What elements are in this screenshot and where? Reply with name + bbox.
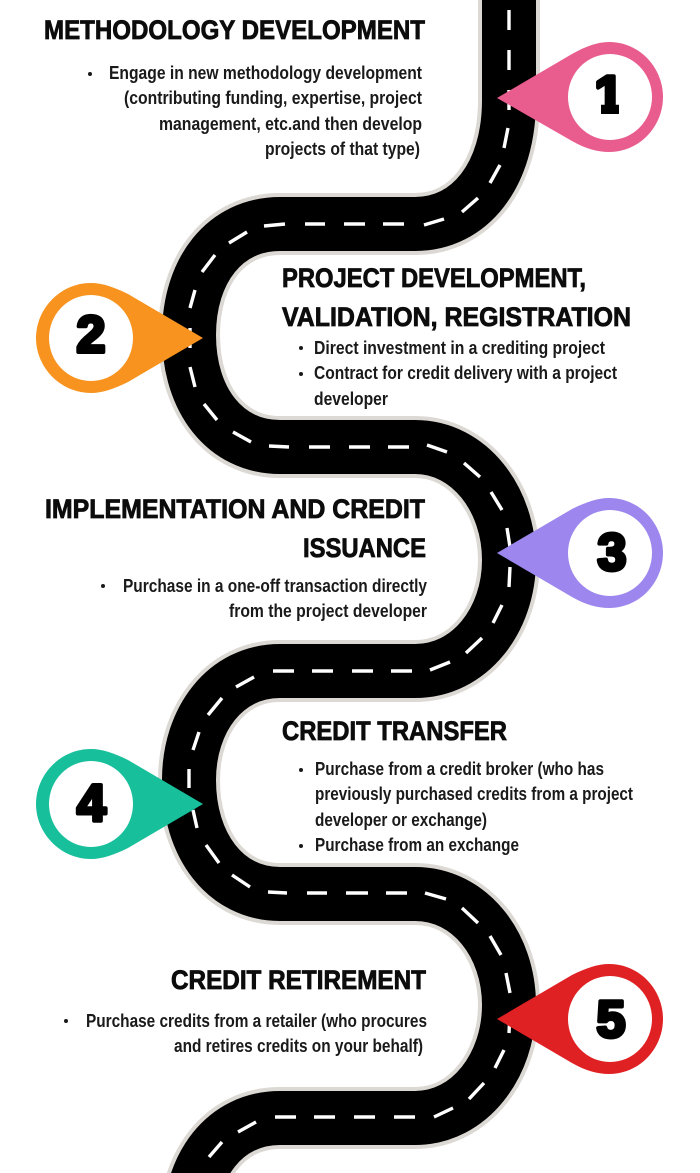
step 1 text: projects of that type) xyxy=(265,138,420,159)
step 2 heading: VALIDATION, REGISTRATION xyxy=(282,302,631,332)
step 5 text: Purchase credits from a retailer (who procures xyxy=(86,1010,427,1031)
step 1 text: management, etc.and then develop xyxy=(159,113,422,134)
step 4 heading: CREDIT TRANSFER xyxy=(282,716,507,746)
step 2 heading xyxy=(282,263,631,332)
step 2 heading: PROJECT DEVELOPMENT, xyxy=(282,263,586,293)
step 5 heading: CREDIT RETIREMENT xyxy=(171,965,426,995)
step 3 heading xyxy=(45,494,426,563)
step 5 pin xyxy=(497,964,663,1074)
step 4 text: previously purchased credits from a project xyxy=(315,783,633,804)
step 4 text: developer or exchange) xyxy=(315,809,487,830)
step 1 heading: METHODOLOGY DEVELOPMENT xyxy=(44,15,425,45)
step 5 text: and retires credits on your behalf) xyxy=(174,1035,423,1056)
step 1 text: Engage in new methodology development xyxy=(109,62,422,83)
step 1 pin: 1 xyxy=(595,66,623,124)
step 1 text: (contributing funding, expertise, project xyxy=(124,87,422,108)
step 4 pin: 4 xyxy=(77,775,106,833)
winding road xyxy=(189,0,510,1173)
step 5 text xyxy=(64,1010,427,1056)
step 3 pin: 3 xyxy=(598,524,626,582)
step 3 heading: ISSUANCE xyxy=(303,533,426,563)
step 4 text xyxy=(299,758,633,855)
step 4 text: Purchase from a credit broker (who has xyxy=(315,758,604,779)
step 4 text: Purchase from an exchange xyxy=(315,834,519,855)
step 2 pin xyxy=(36,283,203,393)
step 3 text: from the project developer xyxy=(229,600,427,621)
step 3 text: Purchase in a one-off transaction directly xyxy=(123,575,428,596)
step 2 text: Contract for credit delivery with a project xyxy=(314,362,617,383)
step 5 pin: 5 xyxy=(597,991,625,1049)
step 3 pin xyxy=(497,498,663,608)
step 1 pin xyxy=(497,42,663,152)
step 2 pin: 2 xyxy=(77,306,105,364)
step 2 text: developer xyxy=(314,388,388,409)
step 2 text xyxy=(299,337,617,409)
step 1 text xyxy=(88,62,422,159)
step 4 pin xyxy=(36,749,203,859)
step 2 text: Direct investment in a crediting project xyxy=(314,337,605,358)
step 3 heading: IMPLEMENTATION AND CREDIT xyxy=(45,494,425,524)
step 3 text xyxy=(101,575,428,621)
